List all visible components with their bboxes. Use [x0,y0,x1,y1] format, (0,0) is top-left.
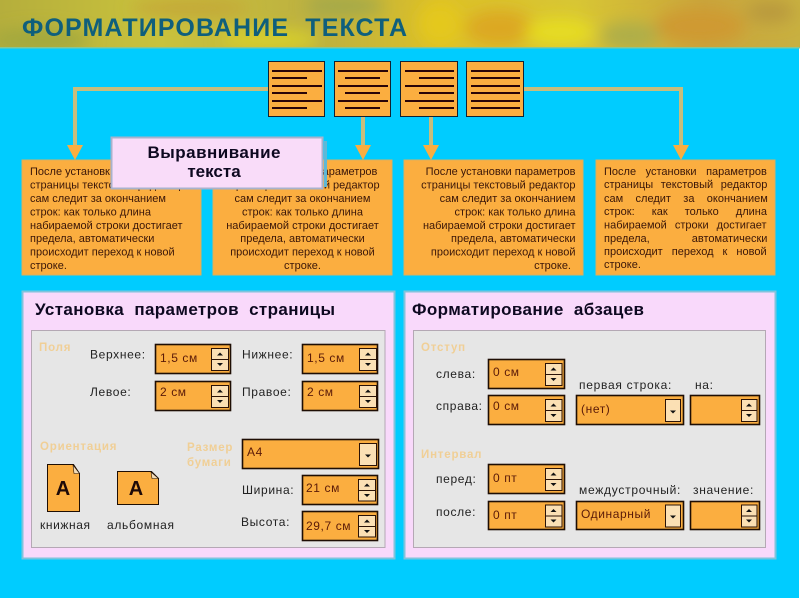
field: left margin: 2 см [160,385,187,399]
label: spacing: Интервал [421,449,482,461]
text box: right aligned: страницы текстовый редактор [421,180,576,192]
text box: left aligned: строке. [30,260,67,272]
icon: justify [466,62,524,116]
text box: centered: После установки параметров [228,166,378,178]
field: space before: 0 пт [493,471,517,485]
dropdown: first line [576,396,684,424]
text box: right aligned: сам следит за окончанием [440,193,576,205]
text box: justified: происходит переход к новой [604,246,767,258]
panel: page setup [22,292,394,558]
text box: left aligned: предела, автоматически [30,233,154,245]
label: by: на: [695,378,714,392]
field: height [241,512,378,540]
text box: right aligned: строке. [534,260,571,272]
text box: justified: После установки параметров [604,166,767,178]
callout: text alignment: Выравнивание [148,143,280,162]
arrow: left alignment connector [67,89,268,160]
text box: right aligned [404,160,583,275]
label: paper size [187,442,233,469]
icon: align center [334,62,390,116]
text box: justified: строке. [604,259,641,271]
text box: centered: строке. [284,260,321,272]
text box: left aligned: страницы текстовый редактор [30,180,184,192]
callout: text alignment: текста [187,162,241,181]
text box: centered: сам следит за окончанием [235,193,370,205]
icon: align right [400,62,458,116]
inner group box [414,330,766,548]
dropdown: first line: (нет) [581,402,610,416]
text box: left aligned [22,160,201,275]
panel: paragraph formatting [404,292,776,558]
field: top margin: Верхнее: [90,348,146,362]
label: orientation: Ориентация [40,441,117,453]
field: bottom margin: Нижнее: [242,348,293,362]
field: space after: 0 пт [493,508,517,522]
text box: centered: набираемой строки достигает [226,220,379,232]
dropdown: paper size: А4 [247,445,263,459]
field: bottom margin [242,344,378,374]
field: space before [436,464,564,494]
field: right margin: 2 см [307,385,334,399]
field: indent right: справа: [436,399,483,413]
field: indent right: 0 см [493,399,520,413]
field: space before: перед: [436,472,476,486]
icon: portrait page: А [56,478,70,500]
text box: left aligned: сам следит за окончанием [30,193,166,205]
label: line spacing: междустрочный: [579,483,681,497]
heading: page setup: Установка параметров страницы [35,300,335,319]
field: left margin [90,382,230,410]
text box: justified: сам следит за окончанием [604,193,768,205]
text box: left aligned: строк: как только длина [30,206,152,218]
text box: centered: предела, автоматически [240,233,365,245]
icon: align left [268,62,324,116]
text box: right aligned: строк: как только длина [455,206,576,218]
arrow: center alignment connector [355,117,371,160]
text box: right aligned: После установки параметров [426,166,576,178]
field: indent right [436,396,564,424]
text box: left aligned: После установки параметров [30,166,180,178]
label: indent: Отступ [421,342,466,354]
icon: landscape page: А [129,478,143,500]
text box: centered [213,160,392,275]
text box: right aligned: предела, автоматически [451,233,576,245]
field: right margin: Правое: [242,385,291,399]
field: left margin: Левое: [90,385,131,399]
label: paper size: Размер [187,442,233,454]
field: height: Высота: [241,515,290,529]
field: indent left: слева: [436,367,476,381]
icon: landscape page [118,472,158,504]
field: right margin [242,382,378,410]
field: width [242,476,378,504]
field: first line value [690,396,760,424]
icon: portrait page [48,464,80,512]
text box: justified: предела, автоматически [604,233,767,245]
header banner with leaves [0,0,800,52]
field: width: Ширина: [242,483,294,497]
field: width: 21 см [306,481,340,495]
field: indent left: 0 см [493,365,520,379]
label: landscape: альбомная [107,518,174,532]
dropdown: line spacing: Одинарный [581,507,651,521]
field: line spacing value [690,502,760,530]
heading: paragraph formatting: Форматирование абзацев [412,300,644,319]
field: height: 29,7 см [306,519,351,533]
field: top margin [90,344,230,374]
text box: justified: набираемой строки достигает [604,220,767,232]
label: portrait: книжная [40,518,90,532]
text box: right aligned: набираемой строки достигает [423,220,576,232]
label: paper size: бумаги [187,457,232,469]
text box: centered: строк: как только длина [242,206,364,218]
field: space after: после: [436,505,476,519]
text box: justified: строк: как только длина [604,206,768,218]
callout: text alignment [112,138,327,188]
field: space after [436,502,564,530]
dropdown: line spacing [576,502,684,530]
arrow: right alignment connector [423,117,439,160]
text box: centered: страницы текстовый редактор [225,180,380,192]
field: indent left [436,360,564,388]
field: bottom margin: 1,5 см [307,351,345,365]
text box: left aligned: набираемой строки достигает [30,220,183,232]
text box: left aligned: происходит переход к новой [30,246,175,258]
label: first line: первая строка: [579,378,672,392]
text box: right aligned: происходит переход к новой [431,246,576,258]
label: value: значение: [693,483,754,497]
arrow: justify connector [524,89,689,160]
dropdown: paper size [242,440,378,468]
field: top margin: 1,5 см [160,351,198,365]
text box: centered: происходит переход к новой [230,246,375,258]
inner group box [32,330,385,548]
label: margins: Поля [39,342,71,354]
title: ФОРМАТИРОВАНИЕ ТЕКСТА [22,14,407,42]
text box: justified: страницы текстовый редактор [604,179,767,191]
text box: justified [596,160,775,275]
